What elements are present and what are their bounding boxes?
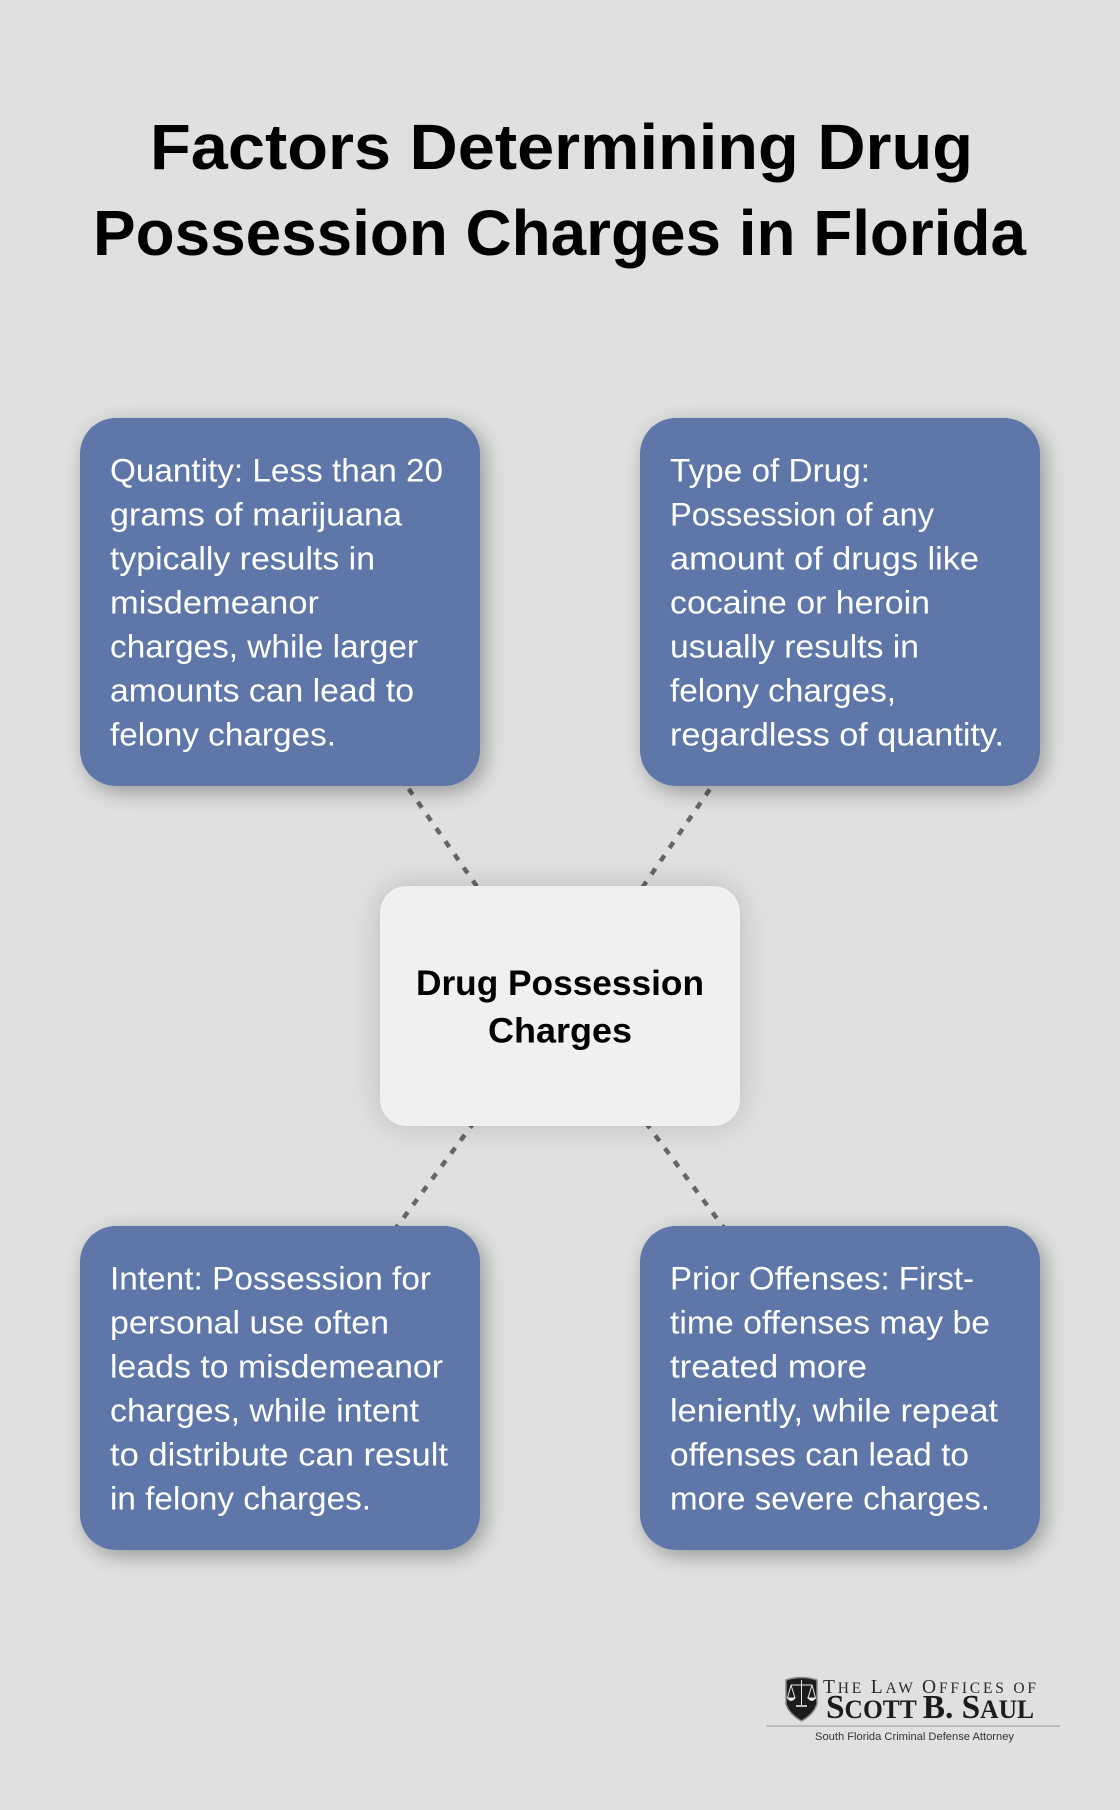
- panel: quantity: amounts can lead to: [110, 673, 414, 709]
- panel: type of drug: Type of Drug:: [670, 453, 870, 489]
- panel: type of drug: usually results in: [670, 629, 919, 665]
- logo text: the law offices of: THE LAW OFFICES OF: [823, 1677, 1036, 1698]
- panel: prior offenses: leniently, while repeat: [670, 1392, 998, 1428]
- panel: type of drug: [640, 418, 1040, 786]
- panel: quantity: typically results in: [110, 541, 375, 577]
- panel: prior offenses: more severe charges.: [670, 1480, 990, 1516]
- panel: type of drug: cocaine or heroin: [670, 585, 930, 621]
- panel: quantity: Quantity: Less than 20: [110, 453, 443, 489]
- panel: intent: charges, while intent: [110, 1392, 419, 1428]
- panel: intent: personal use often: [110, 1304, 389, 1340]
- title: [93, 111, 1026, 269]
- logo text: scott b. saul: SCOTT B. SAUL: [826, 1689, 1034, 1726]
- panel: quantity: felony charges.: [110, 717, 336, 753]
- panel: central topic: Drug Possession: [416, 964, 704, 1003]
- panel: intent: Intent: Possession for: [110, 1260, 431, 1296]
- logo text: tagline: South Florida Criminal Defense Attorney: [815, 1731, 1015, 1743]
- panel: type of drug: felony charges,: [670, 673, 896, 709]
- panel: prior offenses: treated more: [670, 1348, 867, 1384]
- panel: intent: to distribute can result: [110, 1436, 448, 1472]
- icon: scales of justice shield: [786, 1678, 817, 1721]
- panel: type of drug: regardless of quantity.: [670, 717, 1004, 753]
- title: Possession Charges in Florida: [93, 197, 1026, 269]
- panel: type of drug: amount of drugs like: [670, 541, 979, 577]
- panel: intent: in felony charges.: [110, 1480, 371, 1516]
- panel: prior offenses: offenses can lead to: [670, 1436, 969, 1472]
- title: Factors Determining Drug: [150, 111, 973, 183]
- panel: quantity: [80, 418, 480, 786]
- panel: quantity: grams of marijuana: [110, 497, 402, 533]
- panel: prior offenses: Prior Offenses: First-: [670, 1260, 974, 1296]
- panel: prior offenses: [640, 1226, 1040, 1550]
- panel: intent: leads to misdemeanor: [110, 1348, 443, 1384]
- panel: prior offenses: time offenses may be: [670, 1304, 990, 1340]
- panel: central topic: Charges: [488, 1012, 632, 1051]
- panel: quantity: misdemeanor: [110, 585, 319, 621]
- panel: type of drug: Possession of any: [670, 497, 934, 533]
- panel: central topic: [380, 886, 740, 1126]
- panel: quantity: charges, while larger: [110, 629, 418, 665]
- panel: intent: [80, 1226, 480, 1550]
